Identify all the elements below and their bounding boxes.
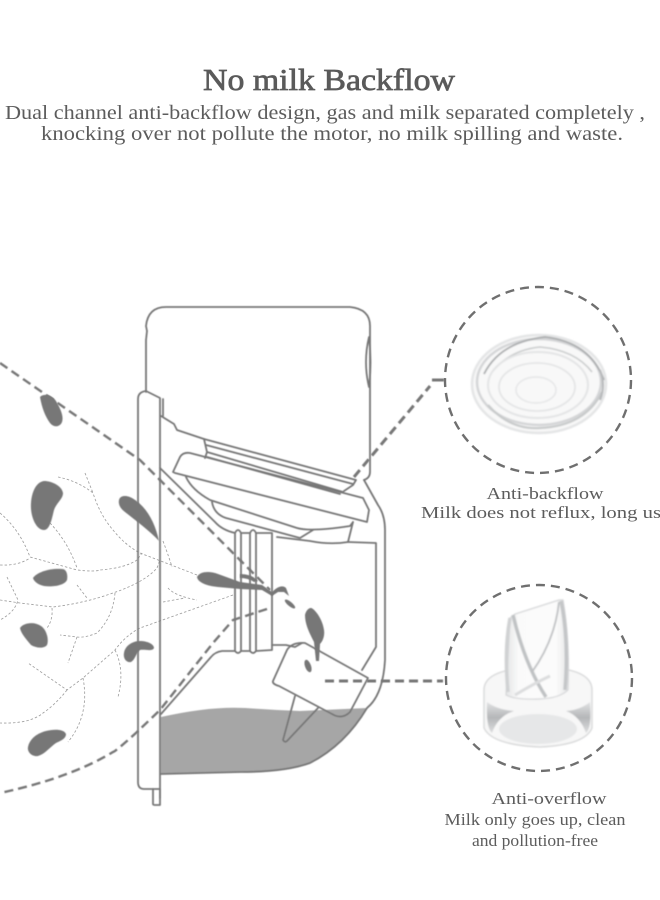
caption: anti-backflow — [421, 484, 660, 522]
dashed circle — [445, 287, 631, 473]
flange and valve seat — [161, 416, 356, 491]
connector rings — [235, 530, 241, 653]
caption: anti-overflow: and pollution-free — [472, 831, 598, 850]
caption: anti-overflow: Milk only goes up, clean — [444, 810, 626, 829]
caption: anti-overflow — [444, 789, 626, 850]
side plate — [138, 391, 160, 798]
milk droplets in breast — [20, 395, 159, 756]
caption: anti-backflow: Milk does not reflux, long us — [421, 503, 660, 522]
callout: anti-backflow disc — [445, 287, 631, 473]
milk flowing through valve — [197, 572, 324, 673]
photo: silicone membrane — [472, 335, 606, 433]
description text — [5, 103, 645, 145]
description text: Dual channel anti-backflow design, gas and milk separated completely , — [5, 103, 645, 124]
leader lines and breast outline — [0, 363, 444, 793]
bottle milk level — [161, 708, 367, 774]
pump outline drawing — [138, 307, 385, 805]
title: No milk Backflow — [203, 62, 456, 97]
caption: anti-backflow: Anti-backflow — [486, 484, 604, 503]
breast milk ducts — [0, 473, 233, 742]
duckbill valve — [273, 643, 368, 717]
photo: duckbill valve — [484, 600, 592, 747]
motor cap — [146, 307, 370, 480]
caption: anti-overflow: Anti-overflow — [492, 789, 607, 808]
description text: knocking over not pollute the motor, no milk spilling and waste. — [41, 124, 623, 145]
dashed circle — [446, 585, 632, 771]
callout: anti-overflow valve — [446, 585, 632, 771]
